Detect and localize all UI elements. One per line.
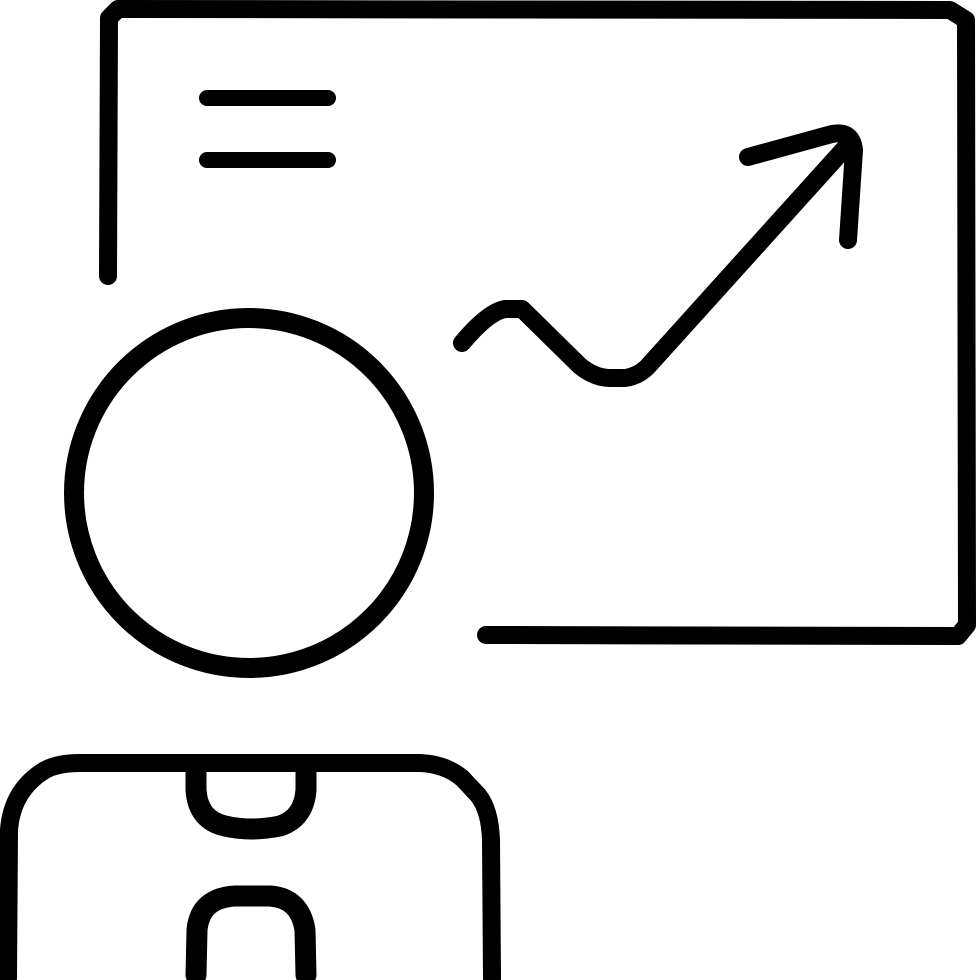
body / shoulders (8, 763, 492, 978)
lower torso line (196, 896, 306, 975)
trend arrow (462, 133, 854, 378)
text lines on board (207, 98, 328, 160)
head (74, 318, 424, 668)
collar (196, 768, 306, 829)
board frame (108, 9, 967, 636)
